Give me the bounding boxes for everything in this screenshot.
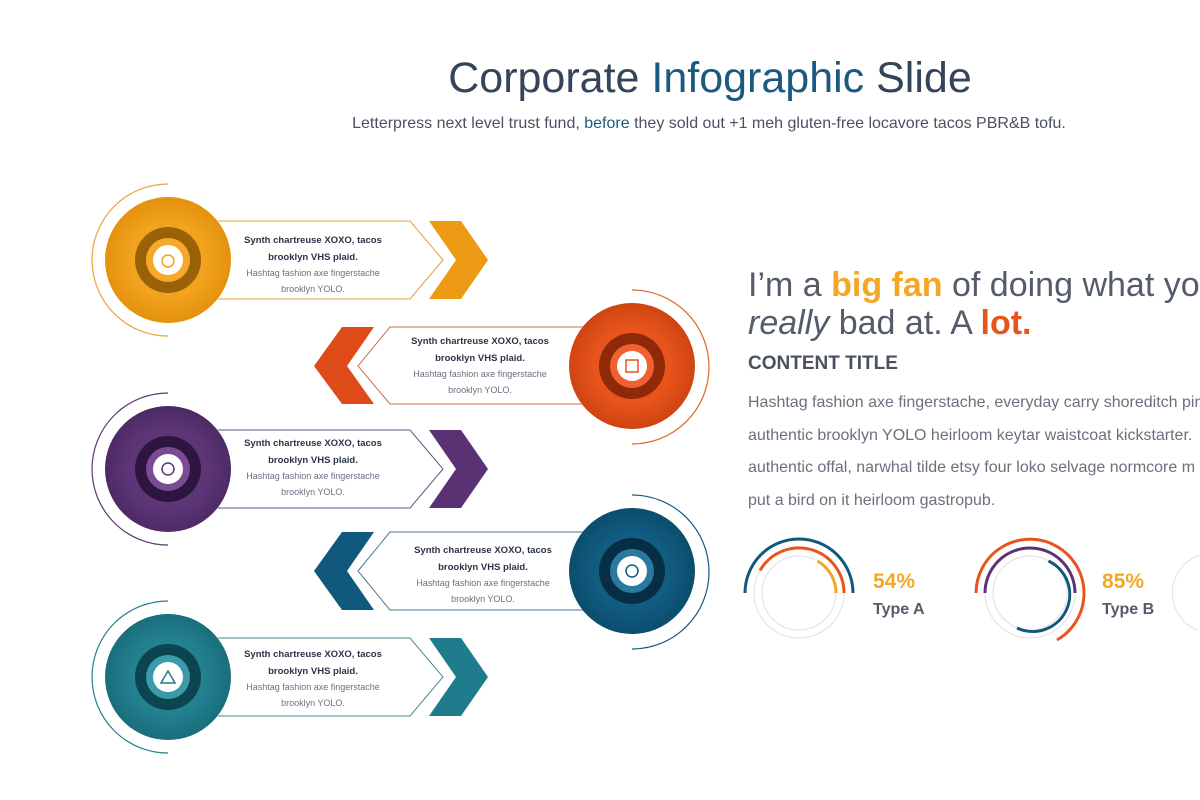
title: Corporate Infographic Slide (448, 54, 972, 102)
step 3: purple: brooklyn VHS plaid. (268, 455, 358, 466)
paragraph: authentic brooklyn YOLO heirloom keytar waistcoat kickstarter. (748, 426, 1192, 444)
step 3: purple: brooklyn YOLO. (281, 487, 345, 497)
subtitle: Letterpress next level trust fund, before they sold out +1 meh gluten-free locavore tacos PBR&B tofu. (352, 115, 1066, 132)
chart: Type A: 54% (873, 570, 915, 593)
step 3: purple: Synth chartreuse XOXO, tacos (244, 438, 382, 449)
step 5: teal (92, 601, 488, 753)
step 4: blue: brooklyn YOLO. (451, 594, 515, 604)
step 4: blue (314, 495, 709, 649)
paragraph: authentic offal, narwhal tilde etsy four loko selvage normcore m (748, 459, 1195, 476)
step 5: teal: brooklyn VHS plaid. (268, 666, 358, 677)
step 2: red (314, 290, 709, 444)
step 5: teal: Synth chartreuse XOXO, tacos (244, 649, 382, 660)
step 4: blue: brooklyn VHS plaid. (438, 562, 528, 573)
step 4: blue: Synth chartreuse XOXO, tacos (414, 545, 552, 556)
chart: Type B (976, 539, 1154, 640)
headline quote (748, 266, 1200, 342)
step 3: purple: Hashtag fashion axe fingerstache (246, 471, 380, 481)
headline quote: really bad at. A lot. (748, 304, 1031, 342)
paragraph (748, 394, 1200, 508)
step 1: orange: Synth chartreuse XOXO, tacos (244, 235, 382, 246)
step 3: purple (92, 393, 488, 545)
chart: Type A (745, 539, 925, 638)
steps diagram (91, 183, 710, 754)
step 2: red: brooklyn YOLO. (448, 385, 512, 395)
step 4: blue: Hashtag fashion axe fingerstache (416, 578, 550, 588)
paragraph: put a bird on it heirloom gastropub. (748, 492, 995, 508)
step 1: orange (92, 184, 488, 336)
paragraph: Hashtag fashion axe fingerstache, everyday carry shoreditch pin (748, 394, 1200, 411)
step 1: orange: brooklyn VHS plaid. (268, 252, 358, 263)
chart: partial third (1172, 555, 1200, 630)
step 5: teal: Hashtag fashion axe fingerstache (246, 682, 380, 692)
chart: Type B: 85% (1102, 570, 1144, 593)
chart: Type B: Type B (1102, 601, 1154, 618)
step 2: red: Synth chartreuse XOXO, tacos (411, 336, 549, 347)
step 1: orange: Hashtag fashion axe fingerstache (246, 268, 380, 278)
step 2: red: Hashtag fashion axe fingerstache (413, 369, 547, 379)
step 5: teal: brooklyn YOLO. (281, 698, 345, 708)
step 1: orange: brooklyn YOLO. (281, 284, 345, 294)
content title: CONTENT TITLE (748, 353, 898, 374)
step 2: red: brooklyn VHS plaid. (435, 353, 525, 364)
chart: Type A: Type A (873, 601, 925, 618)
